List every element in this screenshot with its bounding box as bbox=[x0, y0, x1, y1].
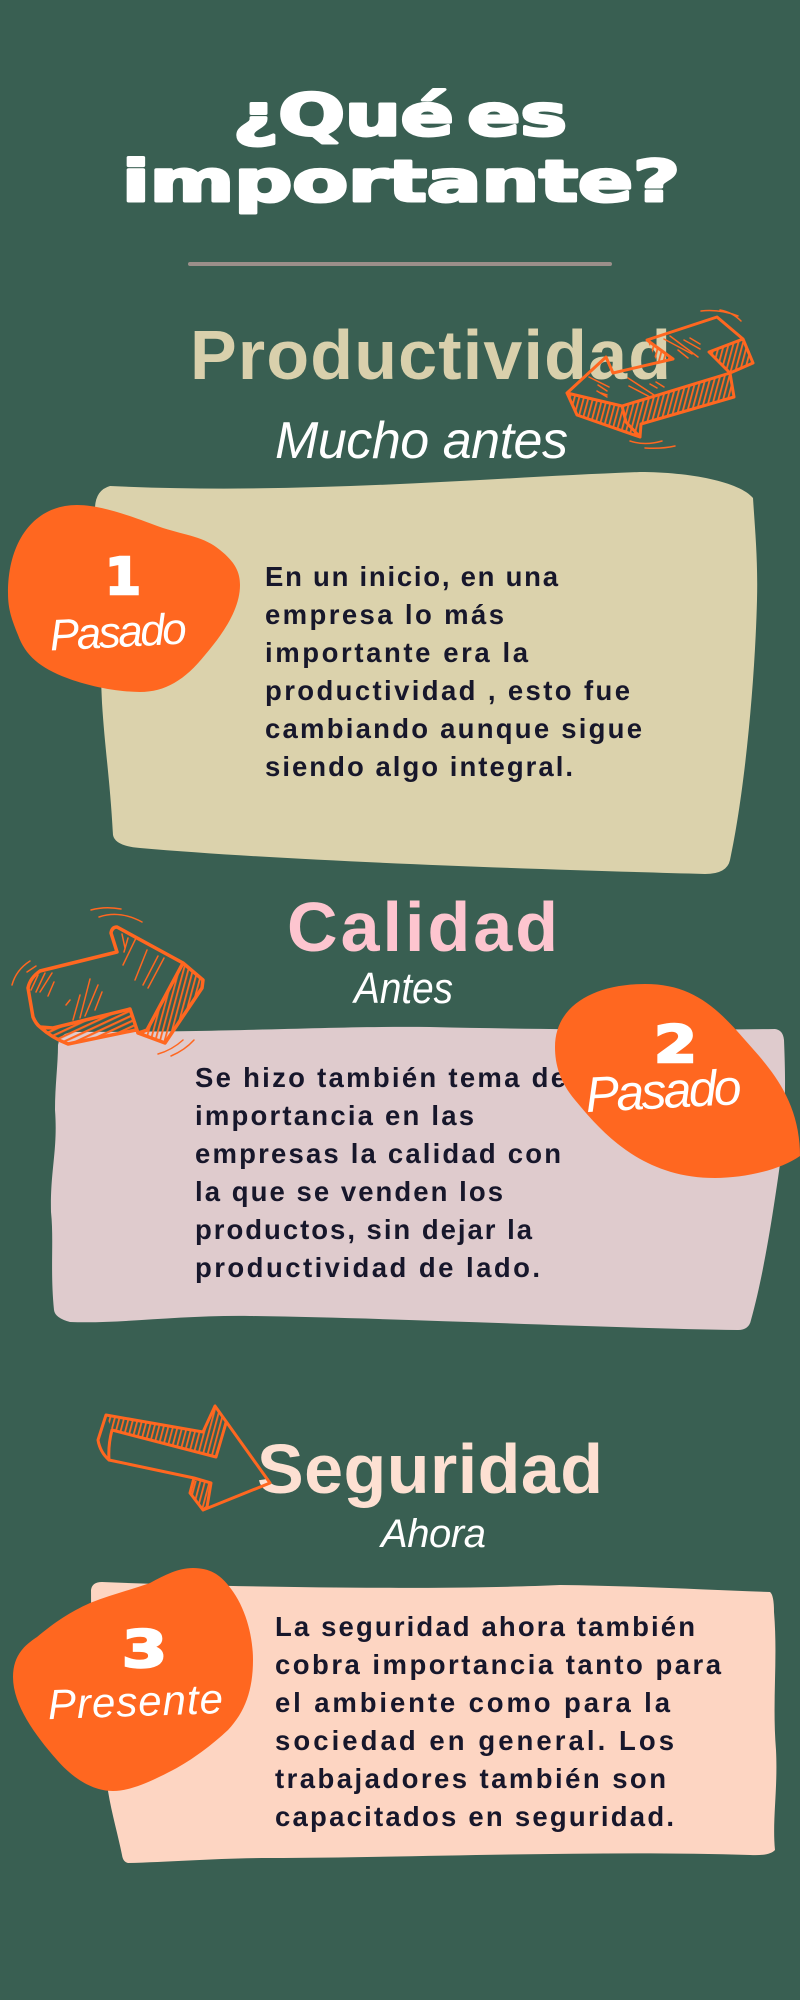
badge: 3 Presente: Presente bbox=[47, 1675, 224, 1728]
badge: 2 Pasado bbox=[555, 984, 800, 1178]
body text: empresa lo más bbox=[265, 599, 504, 630]
body text: importancia en las bbox=[195, 1100, 474, 1131]
subheading: Mucho antes: Mucho antes bbox=[275, 412, 568, 470]
body text: Se hizo también tema de bbox=[195, 1062, 566, 1093]
badge: 1 Pasado: 1 bbox=[105, 548, 141, 607]
badge: 2 Pasado: Pasado bbox=[584, 1059, 743, 1123]
body text: el ambiente como para la bbox=[275, 1687, 671, 1718]
body text bbox=[265, 561, 642, 782]
body text: empresas la calidad con bbox=[195, 1138, 561, 1169]
heading: Calidad: Calidad bbox=[287, 888, 558, 966]
body text: productividad de lado. bbox=[195, 1252, 540, 1283]
body text bbox=[275, 1611, 722, 1832]
title: importante? bbox=[122, 149, 680, 215]
title bbox=[122, 83, 680, 215]
body text: productos, sin dejar la bbox=[195, 1214, 533, 1245]
body text: capacitados en seguridad. bbox=[275, 1801, 674, 1832]
body text: sociedad en general. Los bbox=[275, 1725, 674, 1756]
body text: cambiando aunque sigue bbox=[265, 713, 642, 744]
body text: productividad , esto fue bbox=[265, 675, 630, 706]
panel: Calidad bbox=[51, 984, 800, 1330]
icon: arrow pointing right bbox=[12, 908, 203, 1056]
card background bbox=[91, 1582, 776, 1863]
panel: Productividad bbox=[8, 472, 757, 874]
title: ¿Qué es bbox=[233, 83, 567, 149]
subheading: Antes: Antes bbox=[351, 964, 453, 1013]
body text: En un inicio, en una bbox=[265, 561, 559, 592]
panel: Seguridad bbox=[13, 1568, 776, 1863]
card background bbox=[95, 472, 757, 874]
badge: 3 Presente: 3 bbox=[122, 1621, 167, 1680]
subheading: Ahora: Ahora bbox=[379, 1512, 486, 1556]
badge: 1 Pasado: Pasado bbox=[48, 604, 188, 661]
body text bbox=[195, 1062, 566, 1283]
badge: 2 Pasado: 2 bbox=[654, 1016, 697, 1075]
body text: la que se venden los bbox=[195, 1176, 503, 1207]
body text: importante era la bbox=[265, 637, 529, 668]
icon: arrow pointing left bbox=[567, 310, 753, 448]
body text: La seguridad ahora también bbox=[275, 1611, 695, 1642]
badge: 3 Presente bbox=[13, 1568, 253, 1791]
body text: cobra importancia tanto para bbox=[275, 1649, 722, 1680]
icon: arrow pointing right, sketch bbox=[98, 1406, 270, 1510]
card background bbox=[51, 1027, 785, 1330]
body text: trabajadores también son bbox=[275, 1763, 666, 1794]
badge: 1 Pasado bbox=[8, 505, 240, 692]
body text: siendo algo integral. bbox=[265, 751, 573, 782]
heading: Productividad: Productividad bbox=[190, 316, 671, 394]
heading: Seguridad: Seguridad bbox=[257, 1430, 603, 1508]
